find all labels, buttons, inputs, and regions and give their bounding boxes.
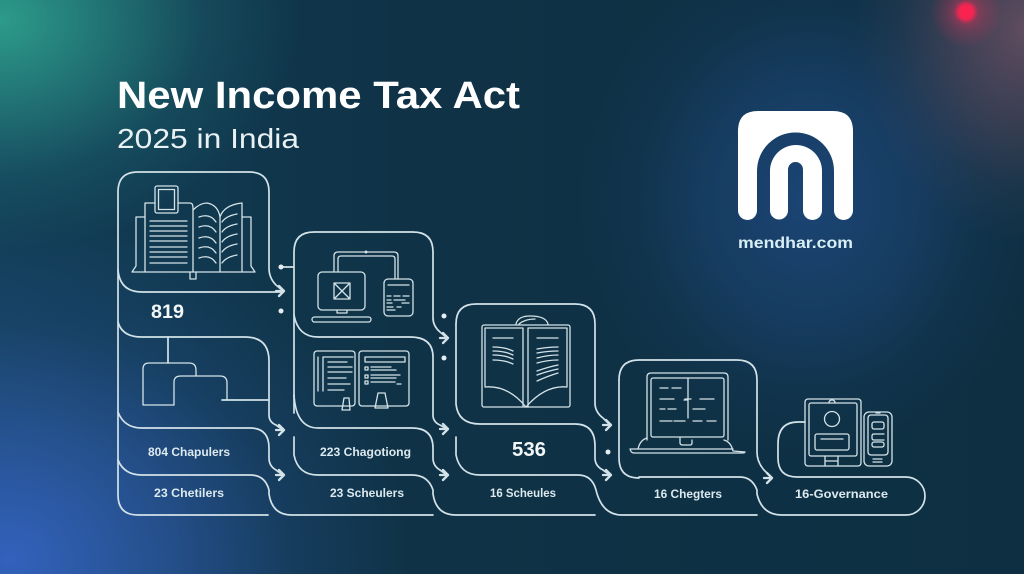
title [117, 75, 520, 154]
logo: mendhar.com [738, 235, 853, 252]
labels: 804 Chapulers [148, 447, 230, 459]
flow connector outlines [118, 172, 925, 515]
title: New Income Tax Act [117, 75, 520, 117]
icon: document panels [314, 351, 409, 410]
icon: tablet and phone [805, 399, 892, 466]
title: 2025 in India [117, 123, 299, 154]
labels: 23 Scheulers [330, 488, 404, 500]
icon: open book with document [132, 186, 255, 279]
icon: open book [482, 316, 570, 407]
icon: laptop and tablet [312, 251, 413, 322]
icon: folders [143, 363, 227, 405]
labels: 16-Governance [795, 487, 888, 501]
labels: 16 Chegters [654, 489, 722, 501]
arrowheads [276, 286, 772, 483]
labels: 16 Scheules [490, 488, 556, 500]
labels: 536 [512, 439, 546, 461]
icon: laptop [630, 373, 745, 453]
connector dots [278, 264, 610, 454]
labels: 23 Chetilers [154, 488, 224, 500]
labels: 819 [151, 301, 184, 323]
logo [738, 111, 853, 252]
labels [148, 301, 888, 501]
labels: 223 Chagotiong [320, 447, 411, 459]
